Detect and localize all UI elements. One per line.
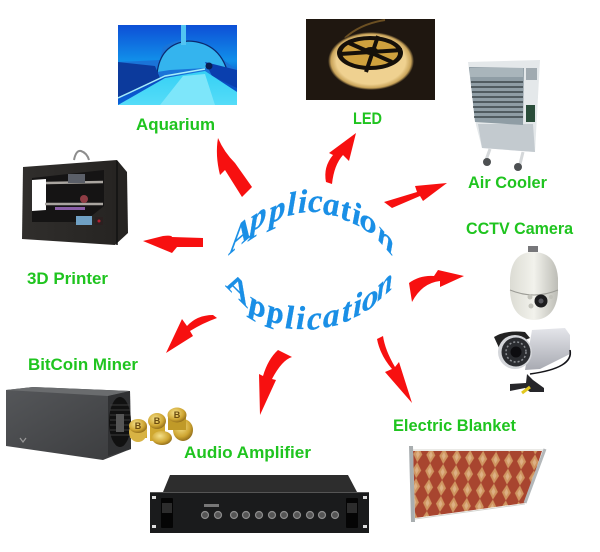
photo: LED strip reel xyxy=(306,19,435,100)
arrow: to air cooler xyxy=(384,183,447,208)
product: 3D printer xyxy=(22,151,128,245)
product: bullet CCTV camera xyxy=(494,328,570,393)
heading: Application upper arc xyxy=(228,184,394,265)
arrow: to CCTV camera xyxy=(409,270,464,302)
heading: Application upper arc: a xyxy=(323,185,340,224)
heading: Application upper arc: t xyxy=(341,191,352,230)
label: 3D Printer: 3D Printer xyxy=(27,269,108,288)
label: Audio Amplifier: Audio Amplifier xyxy=(184,443,311,462)
heading: Application upper arc: l xyxy=(287,185,297,224)
heading: Application lower arc: a xyxy=(323,296,339,336)
heading: Application lower arc: p xyxy=(246,280,265,328)
label: CCTV Camera: CCTV Camera xyxy=(466,219,574,238)
heading: Application lower arc: i xyxy=(296,301,306,337)
icon: gold bitcoins: B xyxy=(174,410,181,420)
product: dome CCTV camera xyxy=(510,246,558,320)
photo: aquarium tunnel xyxy=(118,25,237,105)
heading: Application upper arc: o xyxy=(360,198,376,244)
wheels xyxy=(483,158,522,171)
heading: Application lower arc: t xyxy=(342,291,353,331)
heading: Application lower arc: i xyxy=(353,285,363,326)
status display strip xyxy=(204,504,219,507)
arrow: to aquarium xyxy=(217,138,252,197)
product: electric blanket panel xyxy=(411,446,545,522)
heading: Application lower arc: c xyxy=(307,301,322,338)
heading: Application upper arc: c xyxy=(308,184,323,220)
arrow: to bitcoin miner xyxy=(166,315,217,353)
heading: Application upper arc: p xyxy=(247,193,266,242)
heading: Application upper arc: i xyxy=(352,194,362,235)
heading: Application lower arc: p xyxy=(264,291,284,334)
arrow: to audio amplifier xyxy=(259,350,292,415)
arrow: to LED xyxy=(325,133,356,184)
heading: Application upper arc: i xyxy=(298,184,308,221)
product: air cooler xyxy=(468,60,540,171)
heading: Application lower arc: o xyxy=(362,274,378,320)
heading: Application upper arc: A xyxy=(228,207,252,263)
product: bitcoin miner xyxy=(6,387,131,460)
heading: Application lower arc: l xyxy=(285,300,295,337)
heading: Application upper arc: p xyxy=(266,188,285,233)
heading: Application lower arc: A xyxy=(225,256,249,317)
icon: gold bitcoins xyxy=(129,408,193,445)
label: LED: LED xyxy=(353,109,382,128)
icon: gold bitcoins: B xyxy=(154,416,161,426)
ear slots xyxy=(152,496,367,528)
arrow: to 3D printer xyxy=(143,236,203,253)
label: Electric Blanket: Electric Blanket xyxy=(393,416,516,435)
heading: Application lower arc: n xyxy=(377,259,393,309)
product: audio amplifier xyxy=(150,475,369,533)
heading: Application lower arc xyxy=(225,256,393,338)
knobs xyxy=(202,512,338,518)
heading: Application upper arc: n xyxy=(378,211,394,265)
icon: gold bitcoins: B xyxy=(135,421,142,431)
label: Aquarium: Aquarium xyxy=(136,115,215,134)
arrow: to electric blanket xyxy=(377,336,412,403)
label: Air Cooler: Air Cooler xyxy=(468,173,547,192)
label: BitCoin Miner: BitCoin Miner xyxy=(28,355,138,374)
